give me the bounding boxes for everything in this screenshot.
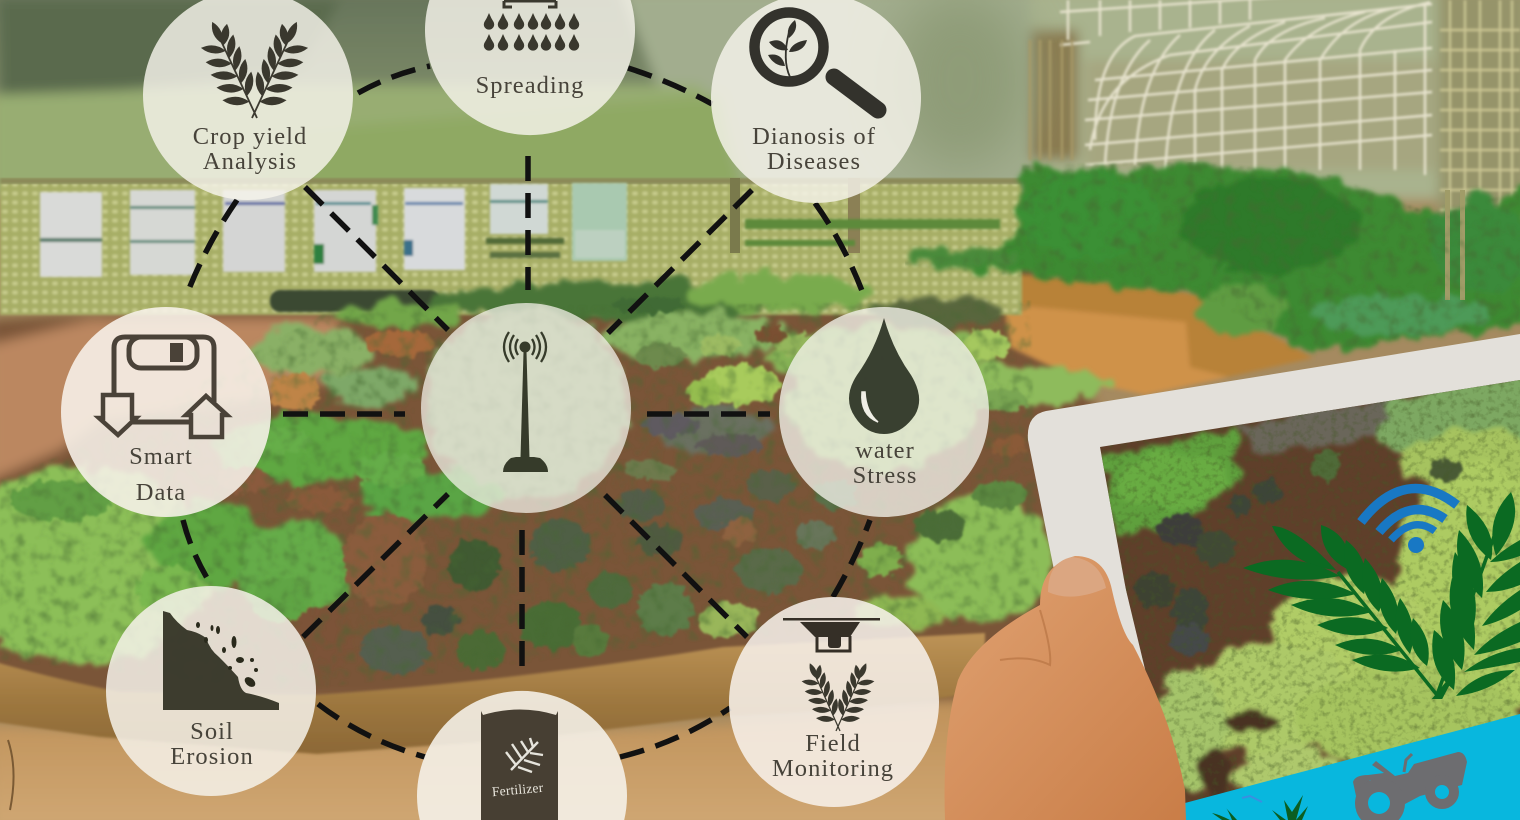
wifi symbol [1361,489,1457,553]
tablet held in hand [945,334,1520,820]
label [752,123,876,175]
label: Erosion [170,743,254,770]
label: Stress [853,462,917,489]
label [193,123,307,175]
raised path on right [800,266,1313,395]
label: Monitoring [772,755,894,782]
garden fence with posters [0,178,1022,315]
label: Spreading [476,72,584,99]
node: spreading [425,0,635,135]
node: soil erosion [106,586,316,796]
label: Field [805,730,861,757]
label: Data [136,479,186,506]
palm fronds on screen [1243,492,1520,697]
node: water stress [779,307,989,517]
node: central antenna [421,303,631,513]
fertilizer label: Fertilizer [491,780,544,799]
tablet screen: lettuce photo [1090,370,1520,815]
leaf texture [0,300,1040,690]
node: crop yield analysis [143,0,353,200]
icon: water drop [849,318,919,434]
icon: drone [783,618,880,651]
bed border and ground [0,633,985,754]
icon: floppy with up and down arrows [99,337,227,437]
label: water [855,437,915,464]
label: Dianosis of [752,123,876,150]
node: smart data [61,307,271,517]
node: field monitoring [729,597,939,807]
icon: tractor [1353,752,1467,820]
label: Soil [190,718,234,745]
connector lines: dashed network [183,66,870,757]
label [170,718,254,770]
icon: magnifier with sprig [754,12,878,110]
background bushes [905,162,1520,352]
tablet bezel [1028,334,1520,812]
label [772,730,894,782]
label: Smart [129,443,193,470]
garden beds with leafy plants [0,272,1110,663]
icon: small plants [1212,795,1308,820]
label: Analysis [203,148,297,175]
icon: wheat branches [793,658,883,738]
icon: sprayer drops [484,1,579,51]
cyan bottom bar on screen [1185,714,1520,820]
label [129,443,193,506]
label [853,437,917,489]
icon: radio tower [503,332,548,472]
label: Diseases [767,148,861,175]
node: fertilizer [417,691,627,820]
hand holding tablet [945,556,1186,820]
node: diagnosis of diseases [711,0,921,203]
icon: eroding hillside [163,611,279,710]
icon: wheat branches [189,14,320,129]
icon: fertilizer bag [481,710,558,820]
greenhouse and trellis [1030,0,1520,305]
label: Crop yield [193,123,307,150]
individual plants [10,296,1028,674]
